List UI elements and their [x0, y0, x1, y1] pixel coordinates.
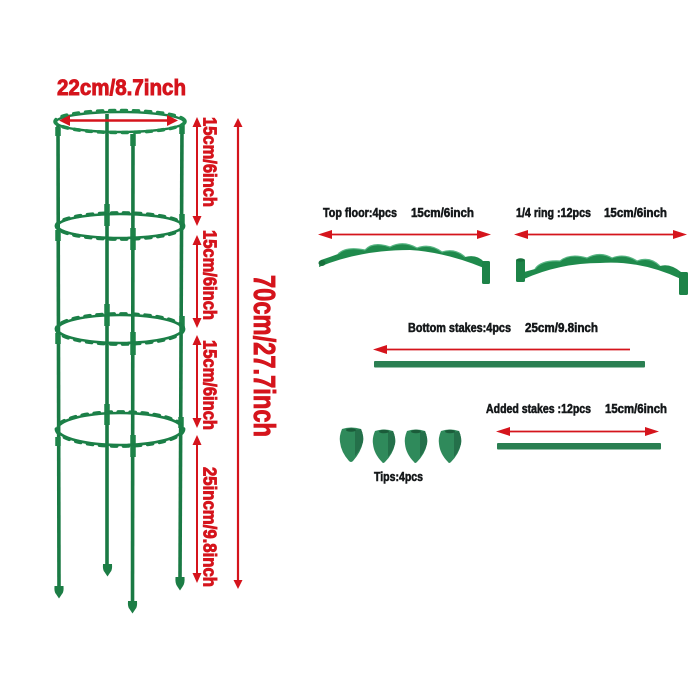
added stakes label: 15cm/6inch: [605, 402, 667, 416]
added stakes label: Added stakes :12pcs: [486, 402, 591, 416]
section height labels: 25incm/9.8inch: [200, 467, 220, 587]
tips: [340, 428, 461, 484]
top floor arc: [318, 244, 490, 284]
plant support tower: [54, 110, 185, 614]
top floor arrow: [318, 230, 491, 239]
tip 3: [405, 430, 427, 463]
bottom stakes label: Bottom stakes:4pcs: [408, 321, 511, 335]
total height label: 70cm/27.7inch: [247, 275, 282, 437]
wavy ring 4: [56, 412, 184, 446]
back stakes: [58, 114, 182, 604]
section height labels: 15cm/6inch: [200, 117, 220, 207]
bottom stakes part: [373, 321, 645, 368]
bottom stakes arrow: [373, 345, 630, 354]
quarter ring label: 1/4 ring :12pcs: [516, 206, 591, 220]
wavy ring 2: [56, 213, 184, 239]
stake connectors: [58, 125, 182, 457]
quarter ring part: [514, 206, 688, 295]
section height labels: 15cm/6inch: [200, 340, 220, 430]
section height labels: [200, 117, 220, 587]
height arrows: [192, 117, 202, 583]
added stake: [497, 443, 661, 450]
top floor part: [318, 206, 491, 284]
width arrow: [59, 115, 178, 126]
section height labels: 15cm/6inch: [200, 230, 220, 320]
added stakes label: [486, 402, 667, 416]
total height arrow: [234, 118, 242, 589]
wavy ring 1: [55, 110, 185, 132]
added stakes part: [486, 402, 667, 450]
quarter ring arc: [516, 254, 688, 295]
tips label: Tips:4pcs: [374, 470, 423, 484]
quarter ring label: 15cm/6inch: [604, 206, 667, 220]
top floor label: [323, 206, 474, 220]
top floor label: 15cm/6inch: [411, 206, 474, 220]
tip 4: [439, 430, 461, 463]
stake tips: [54, 564, 185, 614]
tip 2: [373, 430, 395, 463]
tip 1: [340, 428, 363, 462]
wavy ring 3: [56, 314, 184, 344]
quarter ring arrow: [514, 230, 687, 239]
bottom stakes label: 25cm/9.8inch: [525, 321, 598, 335]
width label: 22cm/8.7inch: [57, 75, 186, 100]
top floor label: Top floor:4pcs: [323, 206, 397, 220]
bottom stakes label: [408, 321, 598, 335]
bottom stake: [374, 361, 645, 368]
quarter ring label: [516, 206, 667, 220]
added stakes arrow: [496, 427, 659, 436]
